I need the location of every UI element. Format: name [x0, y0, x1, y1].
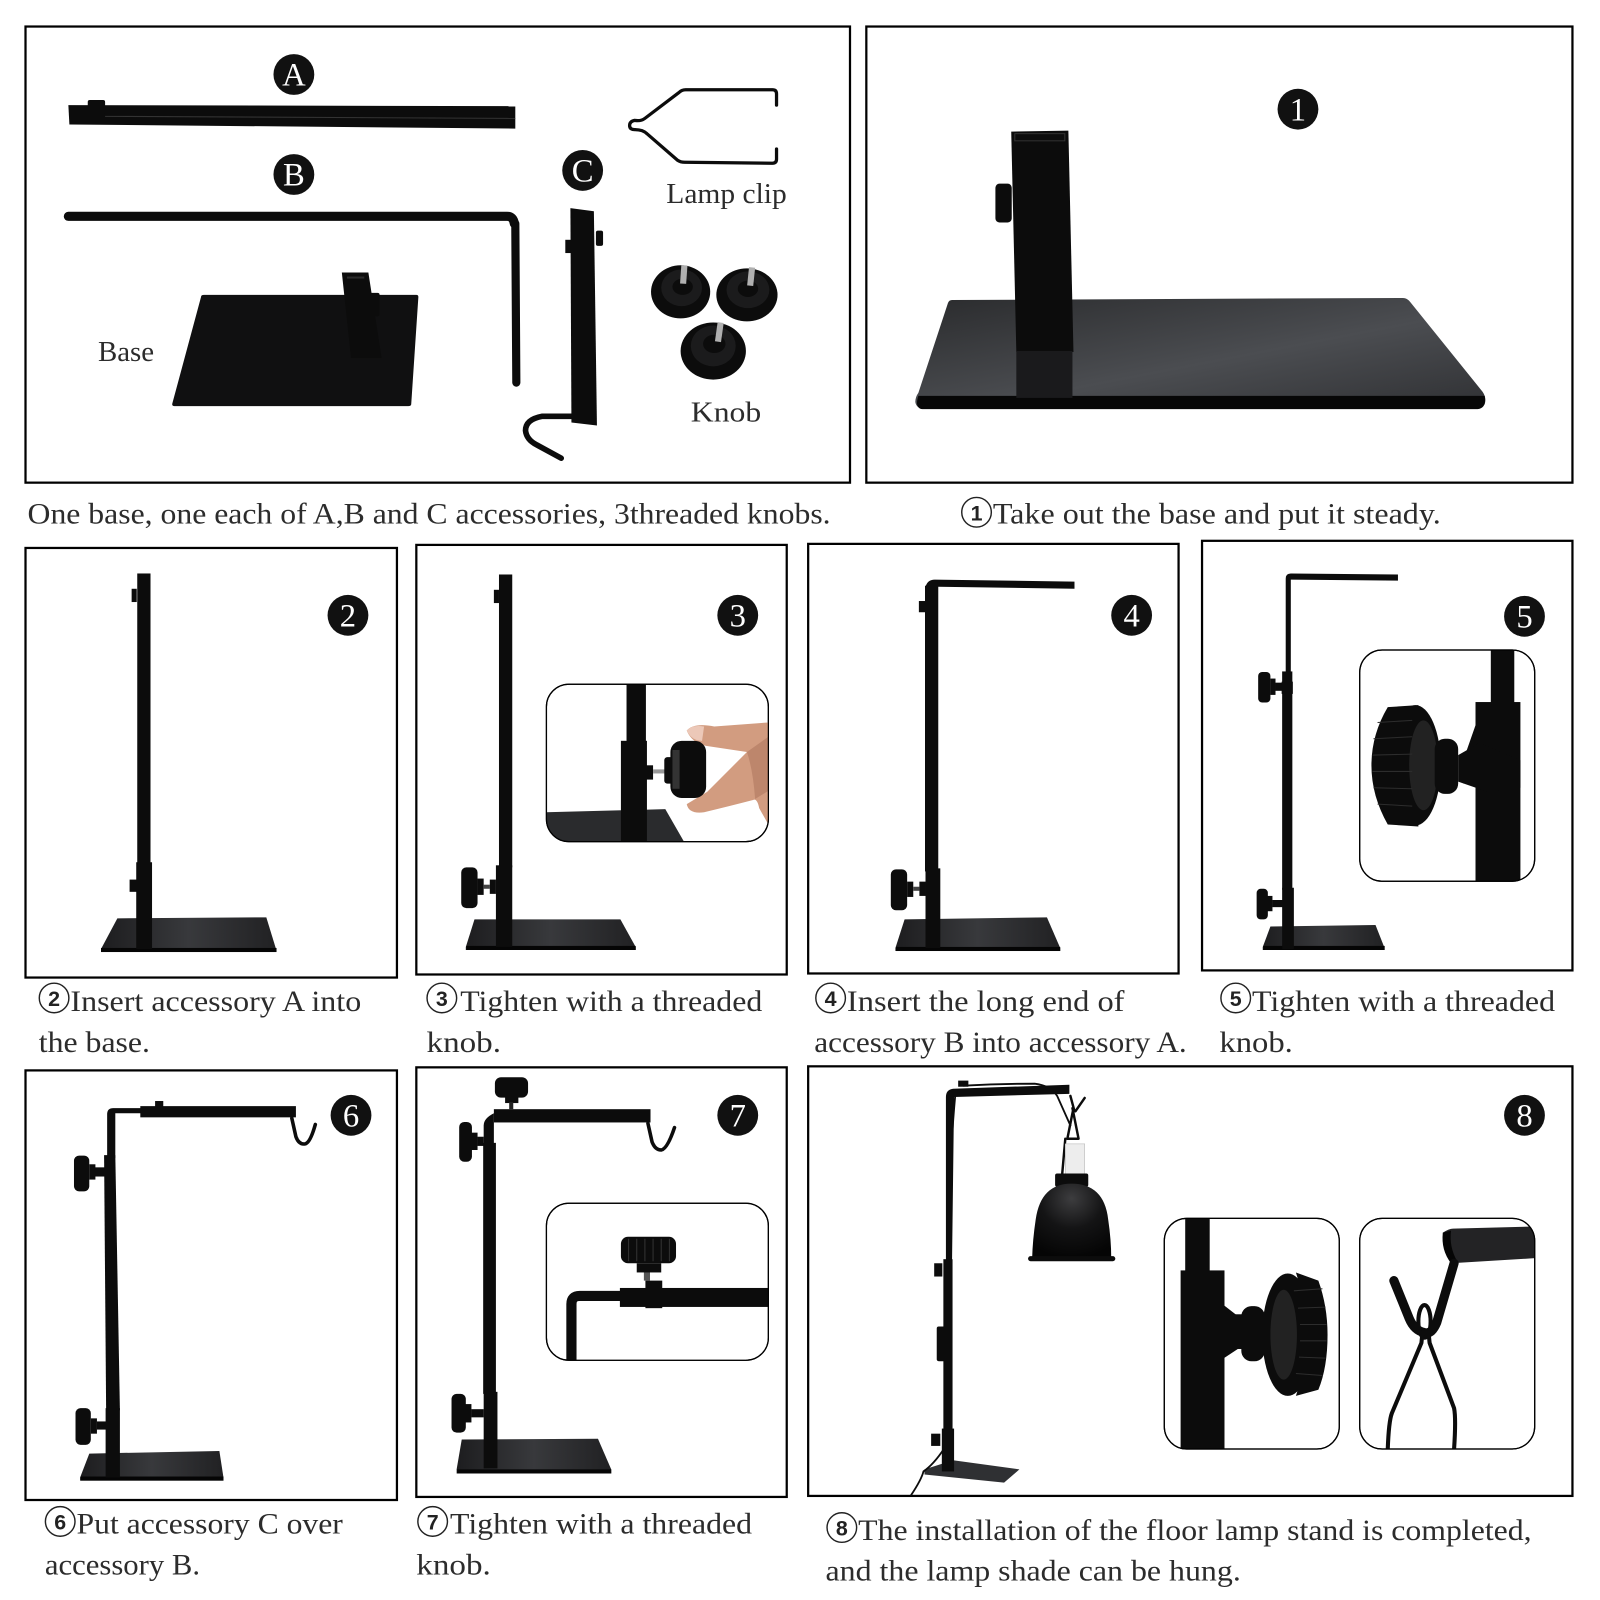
inset: hand tightening knob	[546, 684, 768, 843]
caption: step 2: 2	[48, 987, 60, 1011]
badge: 5	[1504, 596, 1545, 637]
badge: 6: 6	[343, 1099, 359, 1135]
caption: step 8: and the lamp shade can be hung.	[826, 1556, 1241, 1588]
part: accessory B bent rod	[68, 216, 516, 383]
inset: knob detail	[1164, 1218, 1339, 1450]
inset: hook and clip detail	[1360, 1218, 1535, 1449]
badge: 8	[1504, 1095, 1545, 1136]
caption: step 1: Take out the base and put it steady.	[993, 498, 1441, 530]
caption: step 4	[814, 983, 1187, 1059]
badge: B: B	[283, 158, 305, 194]
caption: step 5	[1219, 983, 1555, 1059]
label: Knob: Knob	[691, 397, 761, 428]
caption: step 2: the base.	[39, 1027, 150, 1059]
panel: step 7	[416, 1067, 787, 1497]
stand with rod B	[891, 580, 1074, 951]
panel: step 3	[416, 545, 787, 974]
part: accessory A bar	[68, 100, 515, 129]
caption: step 4: Insert the long end of	[847, 986, 1125, 1018]
badge: 1	[1278, 89, 1318, 130]
panel: step 2	[26, 548, 397, 978]
badge: 5: 5	[1516, 600, 1533, 636]
caption: step 6	[45, 1507, 343, 1581]
badge: 8: 8	[1516, 1099, 1533, 1135]
inset: top knob close-up	[546, 1203, 769, 1362]
badge: 6	[331, 1095, 371, 1136]
inset: knob close-up	[1360, 650, 1535, 882]
badge: A	[273, 54, 314, 95]
caption: step 8	[826, 1513, 1532, 1588]
caption: step 6: 6	[54, 1511, 66, 1535]
stand with accessory C	[74, 1101, 315, 1481]
part: base plate	[172, 272, 418, 406]
caption: step 5: knob.	[1219, 1027, 1293, 1059]
caption: step 6: accessory B.	[45, 1549, 200, 1581]
caption: step 8: 8	[836, 1517, 848, 1541]
badge: 7: 7	[730, 1099, 746, 1135]
icon: hanging lamp shade	[1028, 1096, 1115, 1261]
label: Lamp clip: Lamp clip	[666, 179, 787, 210]
badge: 3	[717, 595, 758, 636]
caption: step 1: 1	[971, 501, 983, 525]
badge: C	[562, 150, 603, 191]
badge: B	[273, 154, 314, 195]
icon: three threaded knobs	[651, 265, 778, 380]
caption: step 4: 4	[825, 987, 837, 1011]
caption: step 2	[39, 983, 361, 1059]
badge: C: C	[572, 154, 594, 190]
panel: step 1	[866, 27, 1572, 483]
caption: step 4: accessory B into accessory A.	[814, 1027, 1187, 1059]
panel: step 6	[26, 1070, 397, 1500]
badge: A: A	[282, 58, 306, 94]
badge: 3: 3	[730, 599, 746, 635]
caption: step 6: Put accessory C over	[77, 1509, 343, 1541]
label: Base: Base	[98, 337, 154, 368]
stand with top knob	[452, 1077, 674, 1473]
stand with knob	[461, 574, 636, 950]
badge: 4	[1111, 595, 1152, 636]
caption: step 7: 7	[427, 1511, 439, 1535]
caption: step 7: Tighten with a threaded	[450, 1509, 752, 1541]
panel: step 5	[1202, 541, 1572, 970]
badge: 2	[328, 595, 368, 636]
base plate large	[915, 298, 1485, 409]
panel: parts overview	[26, 27, 850, 483]
badge: 2: 2	[340, 599, 356, 635]
caption: step 2: Insert accessory A into	[70, 986, 361, 1018]
panel: step 4	[808, 544, 1179, 973]
part: lamp clip	[630, 90, 777, 163]
caption: step 8: The installation of the floor lamp stand is completed,	[858, 1515, 1532, 1547]
badge: 1: 1	[1290, 92, 1306, 128]
caption: step 7: knob.	[416, 1549, 491, 1581]
caption: parts overview: One base, one each of A,B and C accessories, 3threaded knobs.	[28, 498, 831, 530]
caption: step 3: knob.	[427, 1027, 501, 1059]
caption: step 3: Tighten with a threaded	[460, 986, 762, 1018]
caption: step 7	[416, 1507, 752, 1581]
post with clip	[995, 131, 1073, 398]
part: accessory C with hook	[526, 208, 603, 458]
panel: step 8	[808, 1066, 1572, 1496]
stand with base	[101, 573, 277, 952]
badge: 4: 4	[1123, 599, 1140, 635]
caption: step 3: 3	[436, 987, 448, 1011]
stand with two knobs	[1257, 573, 1398, 950]
caption: step 3	[427, 983, 762, 1059]
finished stand with cable	[911, 1081, 1070, 1495]
caption: step 5: 5	[1230, 987, 1242, 1011]
caption: step 5: Tighten with a threaded	[1252, 986, 1555, 1018]
badge: 7	[717, 1095, 758, 1136]
